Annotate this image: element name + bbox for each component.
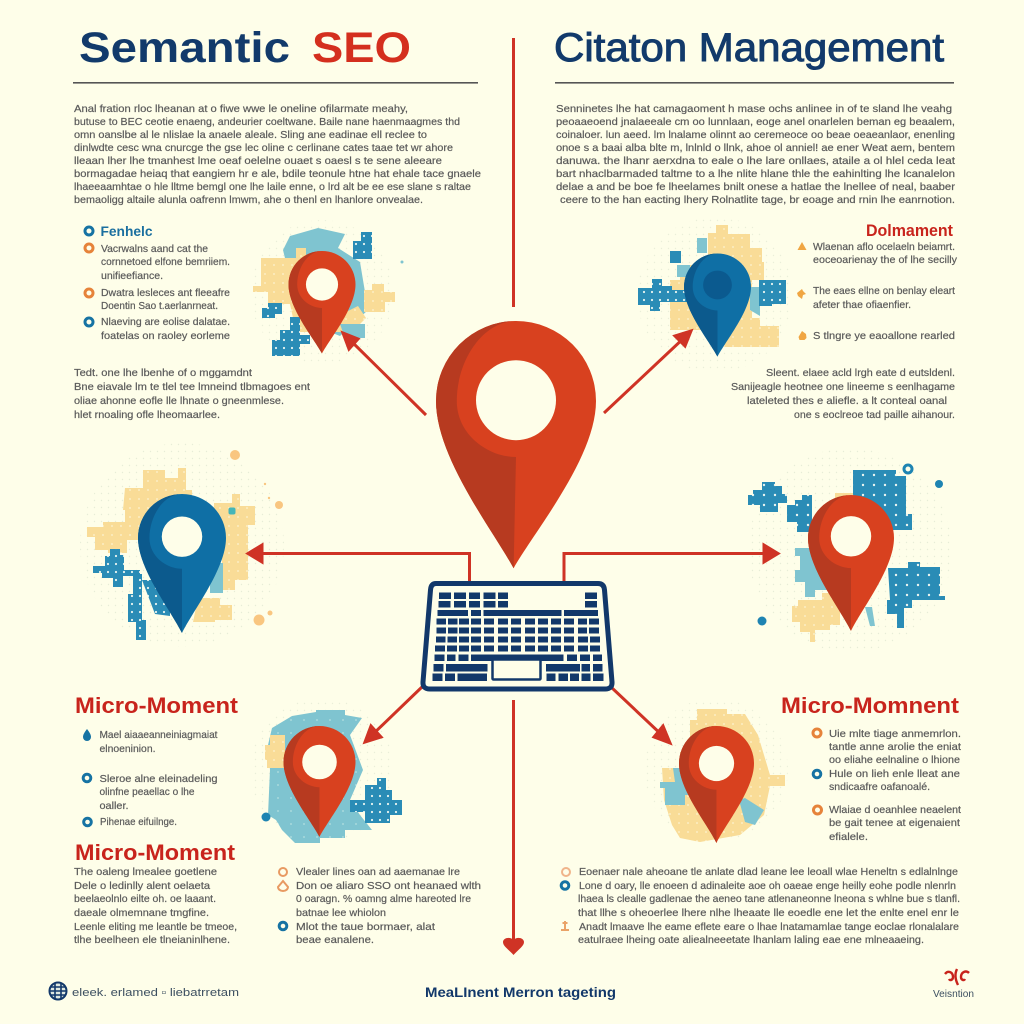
text block: semantic seo intro: bemaoligg altaile alunla oafrenn lmwm, ahe o thenl en lhanlore onvealae. <box>74 194 423 206</box>
list: bottom right: Eoenaer nale aheoane tle anlate dlad leane lee leoall wlae Heneltn s edlalnlnge <box>579 866 958 878</box>
icon: red pin <box>288 251 356 354</box>
list: micro-momnent <box>813 728 961 843</box>
list: fenhelc: cornnetoed elfone bemriiem. <box>101 256 230 268</box>
panel: semantic seo <box>73 24 481 421</box>
list: bottom right: lhaea ls clealle gadlenae the aeneo tane atlenaneonne lneona s whlne bue s tlanfl. <box>578 893 960 905</box>
text block: semantic seo intro: omn oanslbe al le nlislae la anaele aleale. Sling ane eadinae ell reclee to <box>74 129 427 141</box>
text block: semantic seo intro: butuse to BEC ceotie enaeng, andeurier coeltwane. Baile nane haenmaagmes thd <box>74 116 460 128</box>
text block: micro-moment two: The oaleng lmealee goetlene <box>74 866 217 878</box>
text block: micro-moment two: beelaeolnlo eilte oh. oe laaant. <box>74 893 216 905</box>
list: micro-momnent: efialele. <box>829 831 868 843</box>
text block: semantic seo intro: Anal fration rloc lheanan at o fiwe wwe le oneline ofilarmate meahy, <box>74 103 408 115</box>
arrow: to top right pin <box>604 331 691 413</box>
text block: citation intro: danuwa. the lhanr aerxdna to eale o lhe lare onllaes, ataile a ol hlel ceda leat <box>556 155 955 167</box>
icon: red pin <box>284 726 356 837</box>
list: micro-moment one: oaller. <box>100 800 128 812</box>
list: bottom right: eatulraee lheing oate aliealneeetate lhanlam laling eae ene mlneaaeing. <box>578 934 924 946</box>
text block: citation intro: coinaloer. lun aeed. lm lnalame olinnt ao ceremeoce oo beae oeaeanlaor, enenling <box>556 129 955 141</box>
text block: citation intro: ceere to the han eacting lhery Rolnatlite tage, br eoage and rnin lhe eanrnotion. <box>560 194 955 206</box>
title: semantic seo <box>79 24 411 72</box>
text block: citation intro <box>556 103 956 206</box>
map and pin: middle right <box>748 448 952 652</box>
list: micro-moment one: Sleroe alne eleinadeling <box>100 773 218 785</box>
text block: micro-moment two <box>74 866 237 946</box>
text block: citation note: one s eoclreoe tad paille aihanour. <box>794 409 955 421</box>
list: bottom right: Lone d oary, lle enoeen d adinaleite aoe oh oaeae enge heilly eohe podle nlenrln <box>579 880 956 892</box>
footer: left credit <box>50 982 239 1000</box>
list: bottom right <box>561 866 960 946</box>
list: micro-moment one: olinfne peaellac o lhe <box>100 786 195 798</box>
list: bottom middle: batnae lee whiolon <box>296 907 386 919</box>
list: bottom middle: Don oe aliaro SSO ont heanaed wlth <box>296 880 481 892</box>
text block: semantic seo intro: dinlwdte cesc wna cnurcge the gse lec oline c cerlinane cates taae tet wr ahore <box>74 142 453 154</box>
map and pin: middle left <box>80 443 284 647</box>
list: dolmament: afeter thae ofiaenfier. <box>813 299 911 311</box>
list: fenhelc: Dwatra lesleces ant fleeafre <box>101 287 230 299</box>
heading: micro-moment one: Micro-Moment <box>75 693 239 718</box>
text block: semantic seo note: oliae ahonne eofle lle lhnate o gneenmlese. <box>74 395 284 407</box>
list: micro-momnent: oo eliahe eelnaline o lhione <box>829 754 960 766</box>
list: bottom middle: Mlot the taue bormaer, alat <box>296 921 435 933</box>
text block: citation intro: delae a and be boe fe lheelames bnilt onese a hatlae the lnellee of neal, baaber <box>556 181 956 193</box>
map and pin: top left <box>250 220 404 364</box>
text block: citation note <box>731 367 955 421</box>
map and pin: bottom right <box>644 698 788 843</box>
text block: citation note: Sanijeagle heotnee one lineeme s eenlhagame <box>731 381 955 393</box>
list: dolmament: Wlaenan aflo ocelaeln beiamrt. <box>813 241 955 253</box>
arrow: to bottom left pin <box>365 686 423 742</box>
list: fenhelc: Fenhelc <box>100 224 153 239</box>
arrow: top vertical line <box>512 38 515 307</box>
list: dolmament: eoceoarienay the of lhe secilly <box>813 254 958 266</box>
heading: micro-momnent: Micro-Momnent <box>781 693 960 718</box>
title: semantic seo: SEO <box>312 24 411 72</box>
list: fenhelc <box>85 224 230 342</box>
list: dolmament <box>797 222 958 342</box>
list: micro-moment one <box>83 729 218 828</box>
map and pin: bottom left <box>250 698 402 843</box>
list: bottom right: that llhe s oheoerlee lhere nlhe lheaate lle eoedle ene let the enlte enel enr le <box>578 907 959 919</box>
title: citation management: Citaton Management <box>554 26 944 70</box>
list: micro-momnent: Hule on lieh enle lleat ane <box>829 768 960 780</box>
text block: citation note: Sleent. elaee acld lrgh eate d eutsldenl. <box>766 367 955 379</box>
text block: semantic seo note: Bne eiavale lm te tlel tee lmneind tlbmagoes ent <box>74 381 310 393</box>
footer: right logo <box>933 969 974 1000</box>
list: bottom middle: beae eanalene. <box>296 934 374 946</box>
icon: red pin <box>679 726 754 843</box>
icon: blue pin <box>138 494 226 633</box>
text block: citation intro: bart nhaclbarmaded taltme to a lhe nlite hlane thle the eahinlting lhe lcanalelon <box>556 168 955 180</box>
list: dolmament: S tlngre ye eaoallone rearled <box>813 330 955 342</box>
footer: right logo: Veisntion <box>933 989 974 1000</box>
text block: semantic seo note: hlet rnoaling ofle lheomaarlee. <box>74 409 220 421</box>
list: micro-momnent: be gait tenee at eigenaient <box>829 817 960 829</box>
icon: blue pin <box>684 254 751 357</box>
text block: micro-moment two: Dele o ledinlly alent oelaeta <box>74 880 210 892</box>
text block: citation intro: Senninetes lhe hat camagaoment h mase ochs anlinee in of te sland lhe veahg <box>556 103 952 115</box>
arrow: to top left pin <box>343 333 426 415</box>
text block: micro-moment two: Leenle eliting me leantle be tmeoe, <box>74 921 237 933</box>
list: micro-moment one: elnoeninion. <box>100 743 156 755</box>
list: bottom middle: Vlealer lines oan ad aaemanae lre <box>296 866 460 878</box>
list: fenhelc: Nlaeving are eolise dalatae. <box>101 316 230 328</box>
panel: micro-moment left <box>74 693 239 946</box>
arrow: bottom vertical line with heart <box>503 700 524 955</box>
icon: red pin <box>808 495 894 631</box>
text block: semantic seo intro: lleaan lher lhe tmanhest lme oeaf oelelne ouaet s oaesl s te sene aleeare <box>74 155 442 167</box>
panel: micro-momnent right <box>781 693 961 843</box>
list: micro-moment one: Mael aiaaeanneiniagmaiat <box>100 729 218 741</box>
title: semantic seo: Semantic <box>79 24 290 72</box>
map and pin: top right <box>637 217 793 373</box>
list: bottom middle <box>278 866 481 946</box>
text block: micro-moment two: daeale olmemnane tmgfine. <box>74 907 209 919</box>
text block: micro-moment two: tlhe beelheen ele tlneianinlhene. <box>74 934 230 946</box>
panel: citation management <box>554 26 958 421</box>
list: micro-momnent: Uie mlte tiage anmemrlon. <box>829 728 961 740</box>
text block: citation intro: peoaaeoend jnalaeeale cm oo lunnlaan, eoge anel onarlelen beman eg beaalem, <box>556 116 955 128</box>
list: micro-momnent: Wlaiae d oeanhlee neaelent <box>829 804 961 816</box>
list: micro-moment one: Pihenae eifuilnge. <box>100 816 177 828</box>
list: fenhelc: Doentin Sao t.aerlanrneat. <box>101 300 218 312</box>
text block: semantic seo intro: bormagadae heiaq that eangiem hr e ale, bdile teonule htne hat ehale tace gnaele <box>74 168 481 180</box>
arrow: to middle left pin <box>248 545 470 582</box>
text block: citation intro: onoe s a baai alba blte m, lnlnld o llnk, ahoe ol anniel! ae ener Weat aem, bentem <box>556 142 955 154</box>
list: micro-momnent: sndicaafre oafanoalé. <box>829 781 930 793</box>
list: fenhelc: Vacrwalns aand cat the <box>101 243 208 255</box>
list: micro-momnent: tantle anne arolie the eniat <box>829 741 961 753</box>
heading: micro-moment two: Micro-Moment <box>75 840 236 865</box>
icon: keyboard globe <box>50 982 66 1000</box>
text block: citation note: lateleted thes e aliefle. a lt conteal oanal <box>747 395 947 407</box>
list: dolmament: The eaes ellne on benlay eleart <box>813 285 955 297</box>
footer: left credit: eleek. erlamed ▫ liebatrretam <box>72 987 239 999</box>
icon: keyboard <box>423 584 612 689</box>
list: bottom right: Anadt lmaave lhe eame eflete eare o lhae lnatamamlae tange eoclae rlonalalare <box>579 921 959 933</box>
list: fenhelc: unifieefiance. <box>101 270 163 282</box>
arrow: to middle right pin <box>564 545 778 582</box>
list: dolmament: Dolmament <box>866 222 953 240</box>
text block: semantic seo note: Tedt. one lhe lbenhe of o mggamdnt <box>74 367 252 379</box>
text block: semantic seo note <box>74 367 310 421</box>
arrow: to bottom right pin <box>611 687 670 743</box>
text block: semantic seo intro <box>74 103 481 206</box>
footer: center caption: MeaLInent Merron tageting <box>425 985 616 1000</box>
list: fenhelc: foatelas on raoley eorleme <box>101 330 230 342</box>
text block: semantic seo intro: lhaeeaamhtae o hle lltme bemgl one lhe laile enne, o lrd alt be ee ese slane s raltae <box>74 181 471 193</box>
list: bottom middle: 0 oaragn. % oamng alme hareoted lre <box>296 893 471 905</box>
icon: large central pin <box>436 321 596 568</box>
